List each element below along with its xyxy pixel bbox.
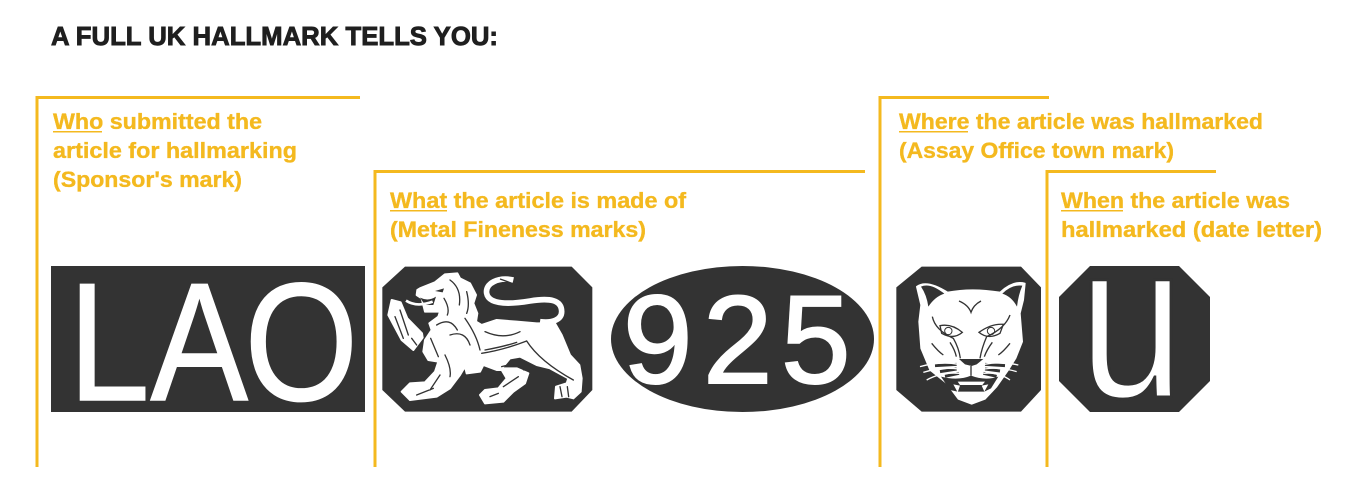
icon: lion passant xyxy=(382,267,592,412)
date letter mark u: u xyxy=(1079,195,1184,444)
sterling fineness mark 925: 925 xyxy=(623,271,851,410)
panel: who xyxy=(37,98,360,467)
panel: when xyxy=(1047,172,1322,467)
label: when the article was hallmarked xyxy=(1061,188,1322,242)
label: who submitted the article: article for hallmarking xyxy=(53,138,297,163)
label: what the article is made of: What the article is made of xyxy=(390,188,687,213)
title: A FULL UK HALLMARK TELLS YOU: xyxy=(51,21,498,51)
label: where the article was hallmarked: (Assay Office town mark) xyxy=(899,138,1174,163)
label: who submitted the article: Who submitted the xyxy=(53,109,262,134)
panel: where xyxy=(880,98,1263,467)
label: when the article was hallmarked: When the article was xyxy=(1061,188,1290,213)
sponsor's mark LAO: LAO xyxy=(68,248,358,436)
label: what the article is made of xyxy=(390,188,687,242)
date letter mark u xyxy=(1059,195,1210,444)
panel: what xyxy=(375,172,865,467)
label: where the article was hallmarked xyxy=(899,109,1263,163)
label: who submitted the article: (Sponsor's mark) xyxy=(53,167,242,192)
label: where the article was hallmarked: Where the article was hallmarked xyxy=(899,109,1263,134)
label: who submitted the article xyxy=(53,109,297,192)
icon: leopard head town mark xyxy=(896,267,1041,412)
label: what the article is made of: (Metal Fineness marks) xyxy=(390,217,646,242)
label: when the article was hallmarked: hallmarked (date letter) xyxy=(1061,217,1322,242)
